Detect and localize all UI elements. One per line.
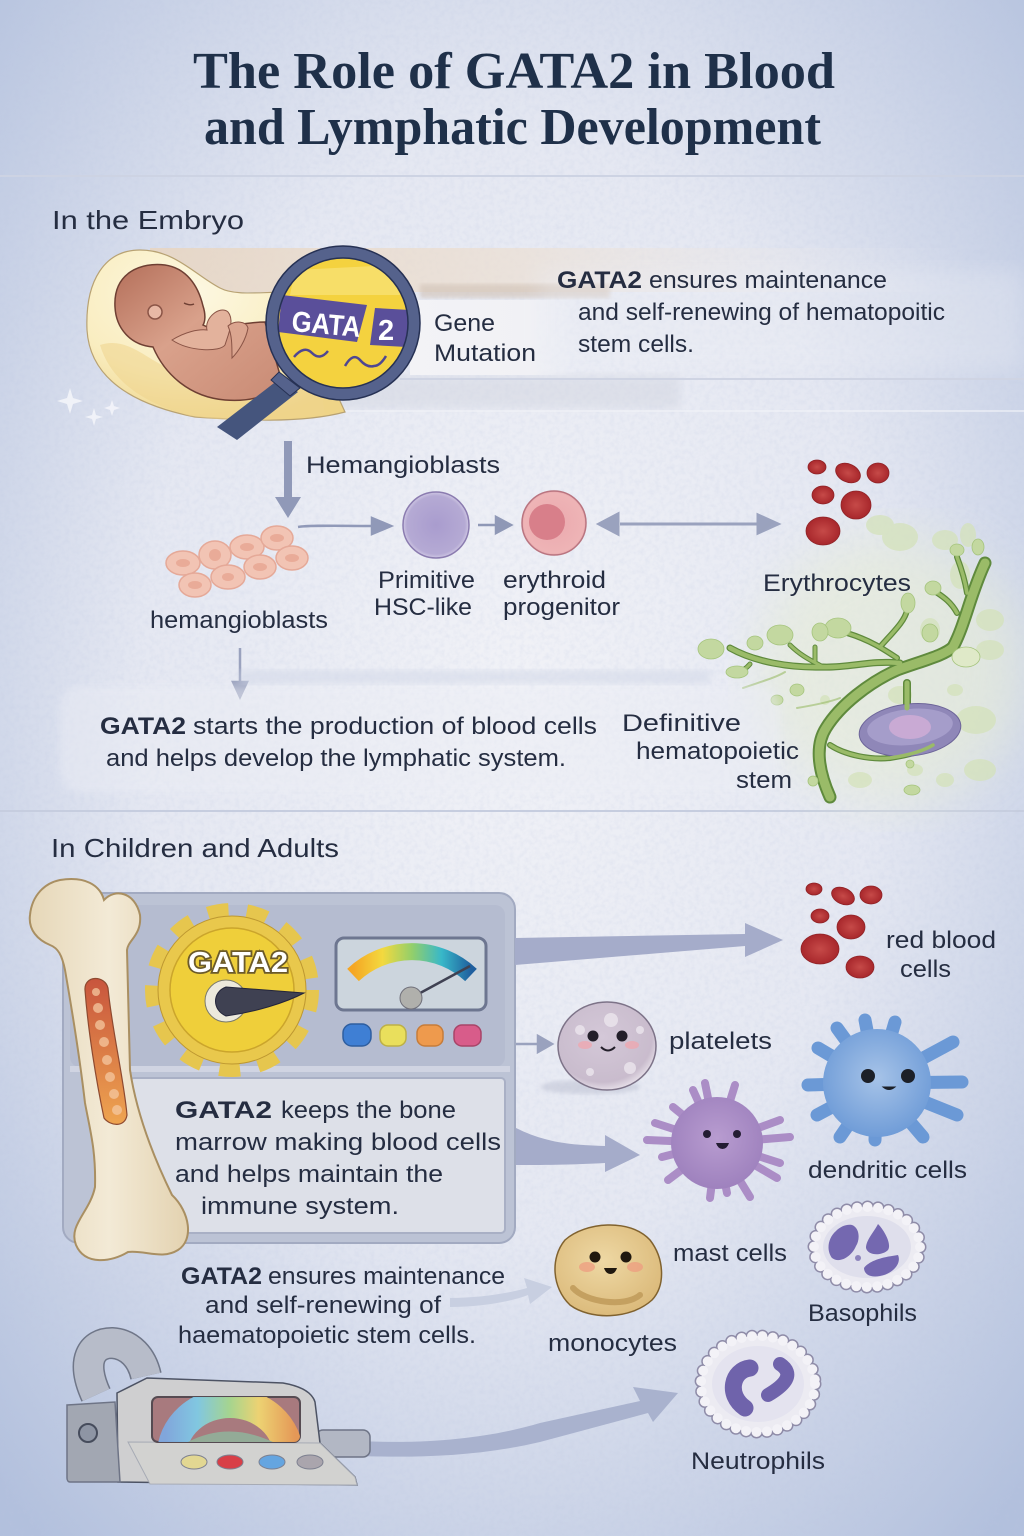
broken GATA band: 2	[378, 315, 394, 347]
label: definitive hematopoietic stem	[622, 710, 799, 794]
icon: neutrophil	[701, 1336, 815, 1432]
title: and Lymphatic Development	[204, 99, 822, 156]
text: GATA2 starts production: GATA2	[100, 713, 186, 740]
text: GATA2 keeps the bone marrow	[175, 1097, 501, 1220]
panel: production text band	[60, 670, 780, 792]
vessel end bulbs	[698, 539, 984, 795]
yolk sac	[87, 250, 345, 420]
label: erythroid progenitor	[503, 567, 620, 621]
icon: magnifying glass with GATA2	[217, 246, 420, 440]
icon: basophil	[814, 1207, 920, 1287]
illustration: embryo in yolk sac	[87, 250, 345, 420]
text: GATA2 ensures maintenance adults: GATA2	[181, 1263, 262, 1290]
text: GATA2 starts production: starts the production of blood cells	[193, 713, 597, 740]
heading: in children and adults: In Children and Adults	[51, 833, 339, 863]
label: red blood cells: cells	[900, 956, 951, 983]
text: GATA2 keeps the bone marrow: GATA2	[175, 1097, 272, 1124]
icon: adult red blood cells	[801, 883, 882, 978]
text: GATA2 starts production: and helps develop the lymphatic system.	[106, 745, 566, 772]
label: Hemangioblasts heading: Hemangioblasts	[306, 452, 500, 479]
label: red blood cells	[886, 927, 996, 983]
title	[193, 43, 835, 156]
icon: monocyte	[555, 1225, 662, 1316]
label: mast cells: mast cells	[673, 1240, 787, 1267]
text: GATA2 ensures maintenance adults: ensures maintenance	[268, 1263, 505, 1290]
green haze	[755, 535, 1024, 805]
arrow: to monocyte	[450, 1278, 552, 1307]
text: GATA2 ensures maintenance adults: and self-renewing of	[205, 1292, 441, 1319]
device body	[117, 1378, 357, 1485]
illustration: bone with marrow	[30, 879, 188, 1260]
embryo arm and hand	[172, 310, 231, 350]
text: GATA2 keeps the bone marrow: marrow making blood cells	[175, 1129, 501, 1156]
icon: mast cell	[647, 1083, 790, 1198]
arrow: to mast cell	[516, 1128, 640, 1172]
arrow: to red blood cells	[515, 923, 783, 965]
broken GATA band: GATA	[290, 306, 362, 344]
illustration: lymphatic vessel network	[698, 515, 1024, 805]
rear connector	[316, 1430, 370, 1457]
label: monocytes: monocytes	[548, 1330, 677, 1357]
label: primitive HSC-like	[374, 567, 475, 621]
label: platelets: platelets	[669, 1028, 772, 1055]
hoses	[89, 1343, 146, 1395]
text: GATA2 ensures maintenance: GATA2	[557, 267, 642, 294]
label: gene mutation: Gene	[434, 310, 495, 337]
device buttons	[181, 1455, 323, 1469]
text: GATA2 keeps the bone marrow: and helps maintain the	[175, 1161, 443, 1188]
label: neutrophils: Neutrophils	[691, 1448, 825, 1475]
label: red blood cells: red blood	[886, 927, 996, 954]
label: definitive hematopoietic stem: Definitive	[622, 710, 741, 737]
label: erythrocytes: Erythrocytes	[763, 570, 911, 597]
icon: erythroid progenitor cell	[522, 491, 586, 555]
text: GATA2 keeps the bone marrow: immune system.	[201, 1193, 399, 1220]
arrow: down to production text	[233, 648, 247, 697]
icon: hemangioblast cell cluster	[166, 526, 308, 597]
label: dendritic cells: dendritic cells	[808, 1157, 967, 1184]
marrow cavity	[85, 978, 127, 1124]
label: hemangioblasts: hemangioblasts	[150, 607, 328, 634]
label: definitive hematopoietic stem: stem	[736, 767, 792, 794]
label: erythroid progenitor: progenitor	[503, 594, 620, 621]
icon: platelet cell	[540, 1002, 656, 1094]
banner behind embryo	[150, 248, 1024, 412]
panel: control panel	[63, 893, 515, 1243]
green vessels lighter fill	[730, 557, 985, 797]
text: GATA2 ensures maintenance: ensures maintenance	[649, 267, 887, 294]
text: GATA2 ensures maintenance	[557, 267, 945, 358]
label: gene mutation	[434, 310, 536, 367]
label: definitive hematopoietic stem: hematopoietic	[636, 738, 799, 765]
label: primitive HSC-like: Primitive	[378, 567, 475, 594]
label: primitive HSC-like: HSC-like	[374, 594, 472, 621]
text: GATA2 ensures maintenance: stem cells.	[578, 331, 694, 358]
text: GATA2 ensures maintenance adults: haematopoietic stem cells.	[178, 1322, 476, 1349]
title: The Role of GATA2 in Blood	[193, 43, 835, 100]
text: GATA2 keeps the bone marrow: keeps the bone	[281, 1097, 456, 1124]
illustration: bone marrow device	[67, 1343, 370, 1485]
text: GATA2 ensures maintenance: and self-renewing of hematopoitic	[578, 299, 945, 326]
icon: sparkles	[57, 388, 120, 426]
arrow: to erythroid progenitor	[478, 517, 511, 533]
arrow: to primitive cell	[298, 518, 391, 534]
icon: primitive HSC-like cell	[403, 492, 469, 558]
broken GATA band	[278, 295, 410, 366]
label: gene mutation: Mutation	[434, 340, 536, 367]
icon: coloured buttons	[343, 1024, 481, 1046]
purple lymph node	[857, 699, 963, 761]
dial knob	[205, 980, 304, 1022]
arrow: to platelets	[516, 1036, 552, 1052]
handle	[217, 380, 298, 440]
text: GATA2 ensures maintenance adults	[178, 1263, 505, 1349]
label: basophils: Basophils	[808, 1300, 917, 1327]
icon: dendritic cell	[808, 1020, 962, 1140]
chart: rainbow gauge	[336, 938, 486, 1010]
icon: embryonic red blood cells	[806, 459, 889, 545]
heading: in the embryo: In the Embryo	[52, 205, 244, 235]
icon: gear dial with GATA2: GATA2	[188, 947, 288, 979]
arrow: device to neutrophils	[360, 1387, 678, 1457]
label: erythroid progenitor: erythroid	[503, 567, 606, 594]
icon: gear dial with GATA2	[155, 913, 309, 1067]
rainbow screen	[151, 1396, 301, 1443]
text: GATA2 starts production	[100, 713, 597, 772]
arrow: down to hemangioblasts	[275, 441, 301, 518]
arrow: double-headed to erythrocytes	[599, 514, 778, 534]
embryo body	[115, 264, 282, 400]
green vessels dark outline	[730, 557, 985, 797]
